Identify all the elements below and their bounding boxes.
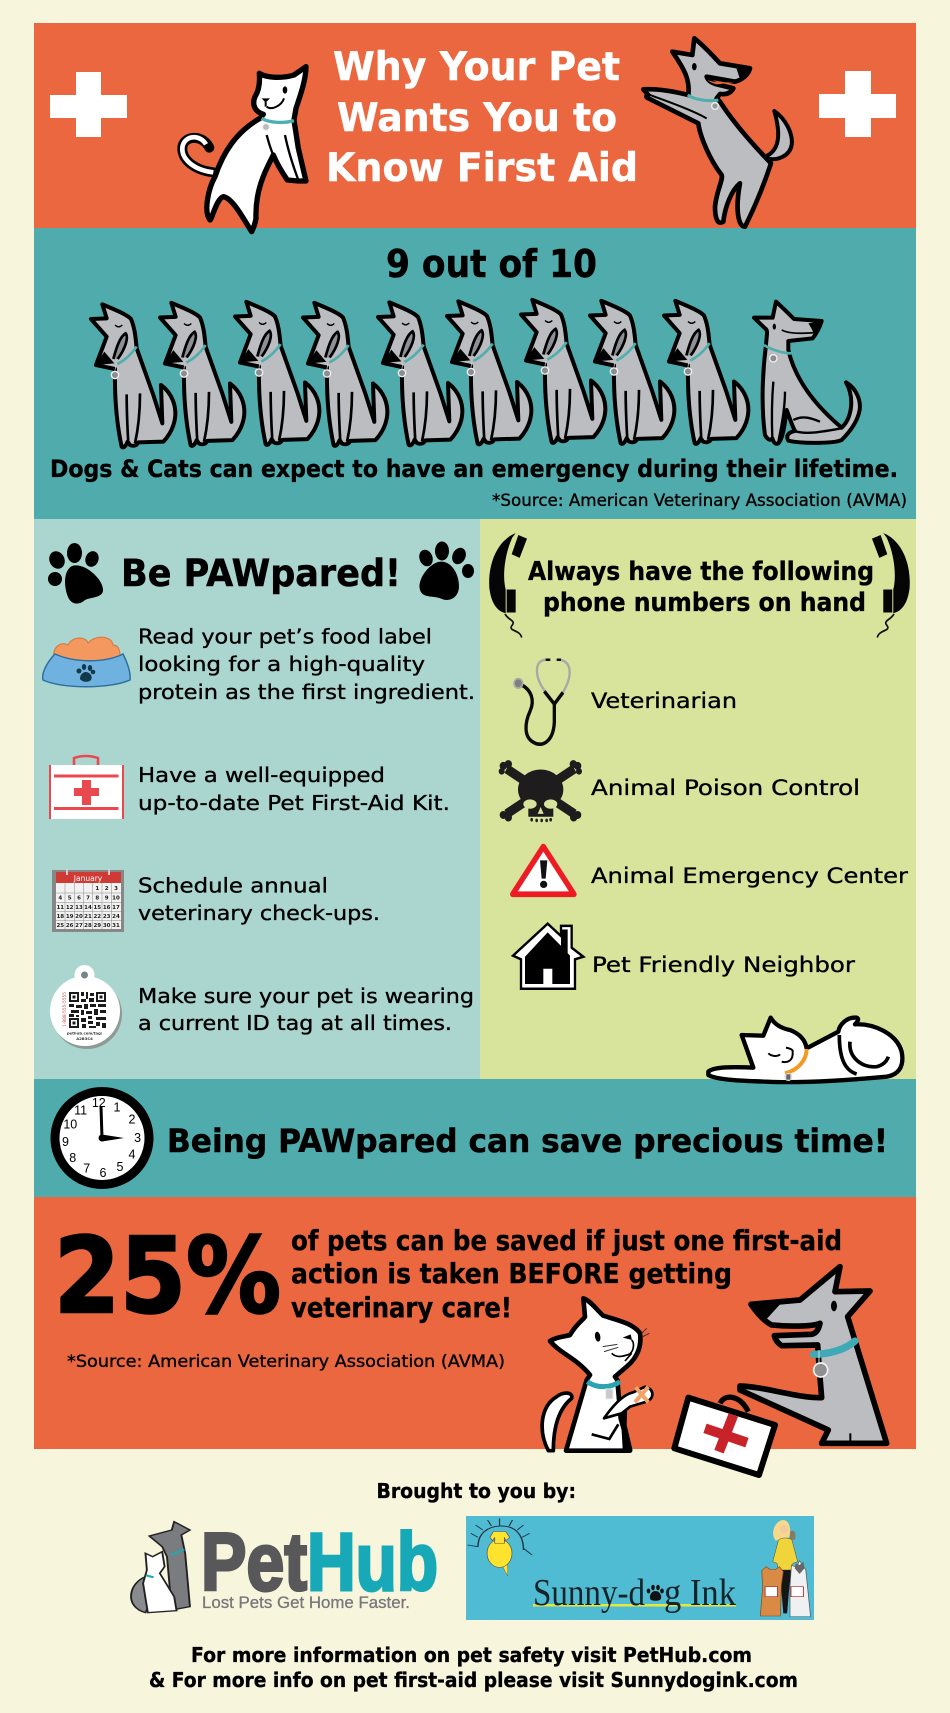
panel: 9 out of 10 [34,228,916,519]
panel: header [34,23,916,228]
icon: calendar: 27 [75,923,83,929]
heading: phone numbers: phone numbers on hand [543,588,866,618]
chart: row of ten dogs [91,300,860,447]
icon: sad dog 8 [590,301,674,444]
text: more information [149,1643,798,1692]
icon: sad dog 9 [664,301,748,444]
heading: be pawpared: Be PAWpared! [121,552,401,595]
illustration: white cat with bandaged paw [542,1298,652,1451]
text: first-aid kit tip: Have a well-equipped [138,763,385,787]
icon: calendar: 4 [58,896,62,902]
icon: sun rays and yellow dog [467,1518,532,1576]
icon: sad dog 1 [91,304,175,447]
icon: calendar: 3 [114,886,118,892]
text: first-aid action statement: veterinary care! [291,1291,512,1324]
text: source: *Source: American Veterinary Association (AVMA) [492,491,907,510]
icon: skull and crossbones [499,760,582,822]
text: ID tag tip [138,984,474,1035]
icon: house [513,924,583,989]
panel: be pawpared [34,519,480,1079]
title: Why Your Pet [333,45,620,90]
text: vet check-up tip: veterinary check-ups. [138,901,380,925]
logo: Sunny-dog Ink [466,1516,814,1620]
text: first-aid kit tip [138,763,450,815]
icon: calendar: 12 [66,905,74,911]
icon: PetHub pets [131,1522,190,1613]
text: animal poison control: Animal Poison Control [591,776,860,801]
wordmark: Sunny-dog Ink: g Ink [664,1572,736,1614]
icon: calendar: 16 [103,905,111,911]
text: source: *Source: American Veterinary Association (AVMA) [67,1352,505,1371]
text: vet check-up tip [138,874,380,925]
illustration: sleeping cat [708,1018,902,1082]
icon: calendar: 29 [93,923,101,929]
icon: pet ID tag: pethub.com/tag/ [67,1030,103,1036]
text: first-aid kit tip: up-to-date Pet First-Aid Kit. [138,791,450,815]
text: vet check-up tip: Schedule annual [138,874,328,898]
text: food label tip: protein as the first ingredient. [138,680,475,704]
illustration: jumping white cat [182,67,306,232]
text: emergency statement: Dogs & Cats can expect to have an emergency during their lifetime. [50,455,898,483]
icon: calendar: 20 [75,914,83,920]
text: pet friendly neighbor: Pet Friendly Neighbor [592,953,855,978]
icon: sad dog 5 [378,302,462,445]
icon: sad dog 7 [521,300,605,443]
icon: clock: 2 [129,1112,136,1126]
icon: stethoscope [514,660,570,744]
icon: clock: 6 [100,1166,107,1180]
tagline: Lost Pets Get Home Faster. [202,1593,410,1612]
text: food label tip: Read your pet’s food label [138,624,432,648]
panel: phone numbers [480,519,916,1079]
icon: clock: 3 [134,1131,141,1145]
icon: calendar: 22 [93,914,101,920]
icon: calendar [52,868,124,932]
wordmark: PetHub: Pet [201,1517,307,1608]
icon: clock: 10 [63,1118,77,1132]
title: Wants You to [337,96,617,141]
icon: calendar: 2 [105,886,109,892]
icon: clock: 4 [129,1148,136,1162]
text: brought to you by: Brought to you by: [376,1479,576,1503]
icon: left white cross [50,72,127,137]
text: ID tag tip: Make sure your pet is wearing [138,984,474,1008]
wordmark: Sunny-dog Ink: Sunny-d [533,1572,645,1614]
wordmark: PetHub: Hub [307,1517,438,1608]
wordmark: Sunny-dog Ink [533,1572,736,1614]
icon: calendar: 15 [93,905,101,911]
icon: calendar: 18 [56,914,64,920]
icon: clock: 7 [83,1162,90,1176]
icon: calendar: 11 [56,905,64,911]
text: ID tag tip: a current ID tag at all times. [138,1011,452,1035]
title [326,45,638,191]
icon: warning triangle [513,847,574,894]
icon: food bowl [43,637,130,687]
text: food label tip: looking for a high-quality [138,652,425,676]
icon: calendar: 28 [84,923,92,929]
icon: calendar: 8 [95,896,99,902]
panel: 25 percent [34,1197,916,1449]
icon: right telephone [872,533,910,638]
icon: clock [55,1092,149,1184]
icon: clock: 9 [62,1135,69,1149]
title: Know First Aid [326,146,638,191]
icon: calendar: 7 [86,896,90,902]
heading: save precious time: Being PAWpared can save precious time! [167,1122,888,1160]
icon: calendar: 17 [112,905,120,911]
icon: happy dog 10 [754,302,860,444]
icon: calendar: 23 [103,914,111,920]
icon: sad dog 6 [447,301,531,444]
text: first-aid action statement: action is taken BEFORE getting [291,1257,732,1290]
icon: calendar: 21 [84,914,92,920]
icon: calendar: 9 [105,896,109,902]
icon: calendar: 5 [68,896,72,902]
icon: calendar: 26 [66,923,74,929]
icon: calendar: 1 [95,886,99,892]
illustration: woman with dogs [760,1520,811,1617]
icon: calendar: 13 [75,905,83,911]
stat: 25 percent: 25% [54,1215,281,1337]
illustration: jumping grey dog [643,38,792,227]
icon: right paw [417,542,474,600]
icon: right white cross [819,71,896,137]
icon: calendar: 25 [56,923,64,929]
text: veterinarian: Veterinarian [591,689,737,714]
icon: pet ID tag: 1-888-555-5555 [62,992,68,1027]
icon: left telephone [489,533,527,638]
icon: clock: 8 [69,1151,76,1165]
icon: calendar: 31 [112,923,120,929]
icon: clock: 1 [114,1100,121,1114]
icon: clock: 12 [92,1096,106,1110]
logo: PetHub [131,1517,438,1613]
icon: calendar: January [73,874,103,883]
icon: sad dog 3 [235,302,319,445]
panel: save time [34,1079,916,1197]
illustration: grey dog with first-aid kit [674,1267,887,1475]
icon: sad dog 2 [160,303,244,446]
icon: clock: 5 [117,1160,124,1174]
icon: pet ID tag [50,965,122,1049]
icon: calendar: 6 [77,896,81,902]
icon: left paw [46,543,103,604]
icon: pet ID tag: A2B3C4 [76,1036,93,1041]
icon: calendar: 24 [112,914,120,920]
icon: clock: 11 [74,1104,87,1118]
icon: sad dog 4 [303,303,387,446]
icon: calendar: 10 [112,896,120,902]
text: more information: & For more info on pet first-aid please visit Sunnydogink.com [149,1668,798,1692]
icon: calendar: 30 [103,923,111,929]
icon: calendar: 19 [66,914,74,920]
text: animal emergency center: Animal Emergency Center [591,864,908,889]
icon: first-aid kit [49,756,124,819]
heading: phone numbers [528,557,874,618]
text: first-aid action statement [291,1224,842,1324]
heading: 9 out of 10: 9 out of 10 [386,242,597,286]
text: more information: For more information on pet safety visit PetHub.com [191,1643,752,1667]
heading: phone numbers: Always have the following [528,557,874,587]
icon: calendar: 14 [84,905,92,911]
text: first-aid action statement: of pets can be saved if just one first-aid [291,1224,842,1257]
text: food label tip [138,624,475,704]
